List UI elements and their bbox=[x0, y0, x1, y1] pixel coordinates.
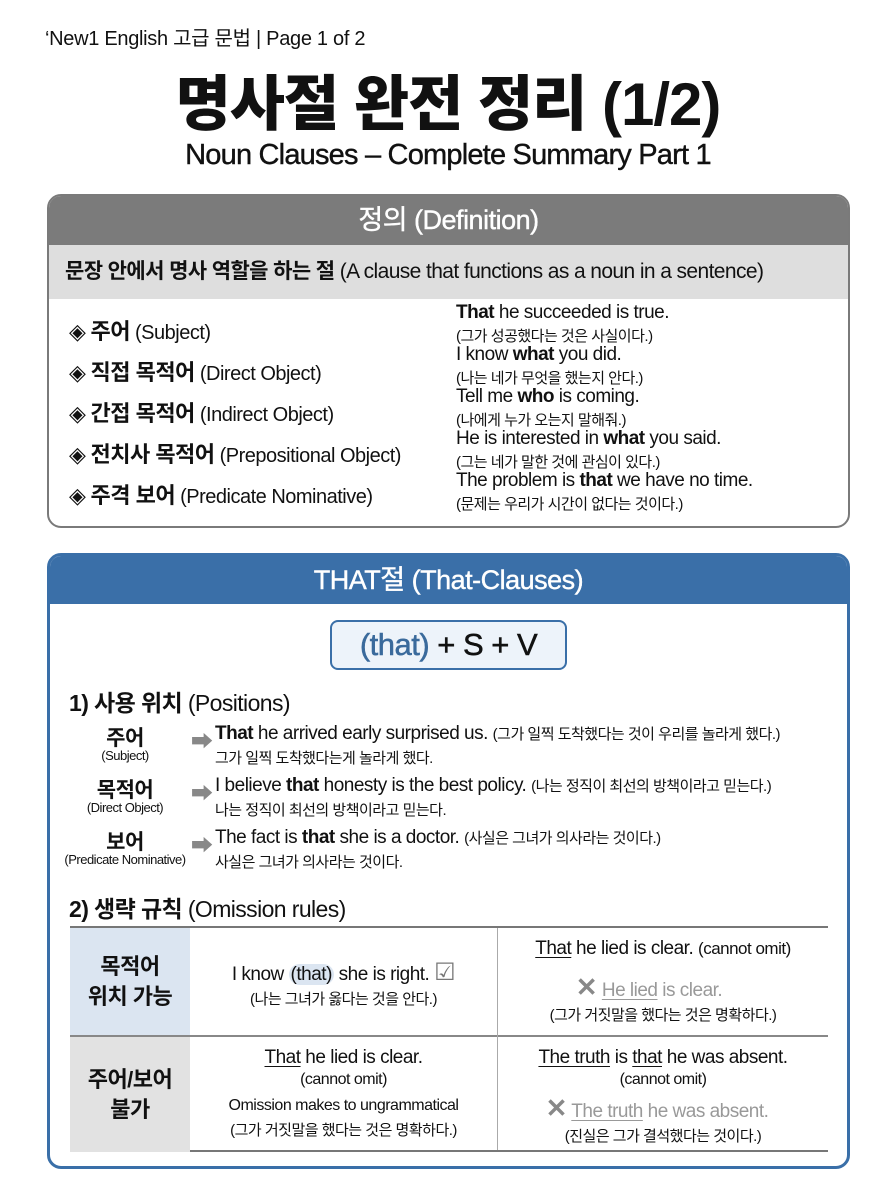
row 1 counter example: That he lied is clear. (cannot omit) bbox=[535, 938, 791, 959]
that header: THAT절 (That-Clauses) bbox=[314, 565, 583, 595]
title: 명사절 완전 정리 (1/2) bbox=[176, 71, 720, 138]
row 2 counter example bbox=[538, 1047, 788, 1145]
row 1 counter example bbox=[535, 938, 791, 1024]
role list: ◈ 간접 목적어 (Indirect Object) bbox=[69, 401, 334, 426]
examples bbox=[456, 302, 753, 513]
examples: Tell me who is coming. bbox=[456, 386, 639, 407]
row 2 label bbox=[70, 1037, 190, 1152]
examples: That he succeeded is true. bbox=[456, 302, 669, 323]
position rows: 주어 bbox=[106, 727, 144, 750]
row 2 example: That he lied is clear. bbox=[264, 1047, 422, 1068]
formula box bbox=[330, 620, 567, 670]
formula box: (that) + S + V bbox=[360, 627, 537, 662]
panel: definition bbox=[47, 194, 850, 528]
header line: ‘New1 English 고급 문법 | Page 1 of 2 bbox=[45, 28, 365, 50]
position rows: ➡ bbox=[191, 729, 213, 754]
examples: He is interested in what you said. bbox=[456, 428, 721, 449]
position rows: ➡ bbox=[191, 781, 213, 806]
position rows: 그가 일찍 도착했다는게 놀라게 했다. bbox=[215, 750, 433, 767]
row 2 example bbox=[229, 1047, 458, 1139]
row 1 example bbox=[232, 959, 455, 1008]
role list: ◈ 주어 (Subject) bbox=[69, 319, 211, 344]
position rows: (Subject) bbox=[101, 748, 149, 763]
position rows: The fact is that she is a doctor. (사실은 그녀가 의사라는 것이다.) bbox=[215, 827, 661, 848]
examples: (나에게 누가 오는지 말해줘.) bbox=[456, 412, 626, 429]
position rows: (Direct Object) bbox=[87, 800, 163, 815]
definition subheader bbox=[49, 245, 848, 299]
position rows bbox=[64, 723, 780, 871]
position rows: ➡ bbox=[191, 833, 213, 858]
examples: (그는 네가 말한 것에 관심이 있다.) bbox=[456, 454, 660, 471]
position rows: 목적어 bbox=[97, 779, 153, 802]
row 2 counter example: (cannot omit) bbox=[620, 1071, 706, 1088]
position rows: 보어 bbox=[106, 831, 144, 854]
row 1 counter example: ✕ He lied is clear. bbox=[576, 972, 722, 1002]
position rows: I believe that honesty is the best policy. (나는 정직이 최선의 방책이라고 믿는다.) bbox=[215, 775, 771, 796]
examples: (문제는 우리가 시간이 없다는 것이다.) bbox=[456, 496, 683, 513]
row 2 counter example: The truth is that he was absent. bbox=[538, 1047, 788, 1068]
examples: (나는 네가 무엇을 했는지 안다.) bbox=[456, 370, 643, 387]
row 2 label: 주어/보어 bbox=[88, 1067, 172, 1092]
row 2 label: 불가 bbox=[110, 1097, 150, 1122]
position rows: 사실은 그녀가 의사라는 것이다. bbox=[215, 854, 403, 871]
omission heading: 2) 생략 규칙 (Omission rules) bbox=[69, 896, 346, 922]
role list: ◈ 주격 보어 (Predicate Nominative) bbox=[69, 483, 373, 508]
subtitle: Noun Clauses – Complete Summary Part 1 bbox=[185, 139, 711, 171]
position rows: That he arrived early surprised us. (그가 일찍 도착했다는 것이 우리를 놀라게 했다.) bbox=[215, 723, 780, 744]
role list: ◈ 직접 목적어 (Direct Object) bbox=[69, 360, 321, 385]
row 2 example: Omission makes to ungrammatical bbox=[229, 1097, 458, 1114]
row 1 example: (나는 그녀가 옳다는 것을 안다.) bbox=[250, 991, 437, 1008]
panel: that-clauses bbox=[47, 553, 850, 1169]
position rows: 나는 정직이 최선의 방책이라고 믿는다. bbox=[215, 802, 446, 819]
role list: ◈ 전치사 목적어 (Prepositional Object) bbox=[69, 442, 401, 467]
definition subheader: 문장 안에서 명사 역할을 하는 절 (A clause that functions as a noun in a sentence) bbox=[65, 260, 763, 283]
row 2 example: (cannot omit) bbox=[300, 1071, 387, 1088]
row 1 example: I know (that) she is right. ☑ bbox=[232, 959, 455, 986]
role list bbox=[69, 319, 401, 508]
definition header: 정의 (Definition) bbox=[358, 205, 539, 235]
row 1 label bbox=[70, 928, 190, 1035]
examples: I know what you did. bbox=[456, 344, 621, 365]
row 1 label: 위치 가능 bbox=[88, 984, 172, 1009]
row 2 counter example: ✕ The truth he was absent. bbox=[546, 1093, 768, 1123]
definition header bbox=[49, 196, 848, 245]
position rows: (Predicate Nominative) bbox=[64, 852, 186, 867]
positions heading: 1) 사용 위치 (Positions) bbox=[69, 690, 290, 716]
row 1 label: 목적어 bbox=[100, 954, 160, 979]
examples: The problem is that we have no time. bbox=[456, 470, 753, 491]
omission table bbox=[70, 926, 828, 1152]
examples: (그가 성공했다는 것은 사실이다.) bbox=[456, 328, 653, 345]
that header bbox=[50, 556, 847, 604]
row 2 counter example: (진실은 그가 결석했다는 것이다.) bbox=[565, 1128, 761, 1145]
row 1 counter example: (그가 거짓말을 했다는 것은 명확하다.) bbox=[550, 1007, 776, 1024]
row 2 example: (그가 거짓말을 했다는 것은 명확하다.) bbox=[230, 1122, 457, 1139]
